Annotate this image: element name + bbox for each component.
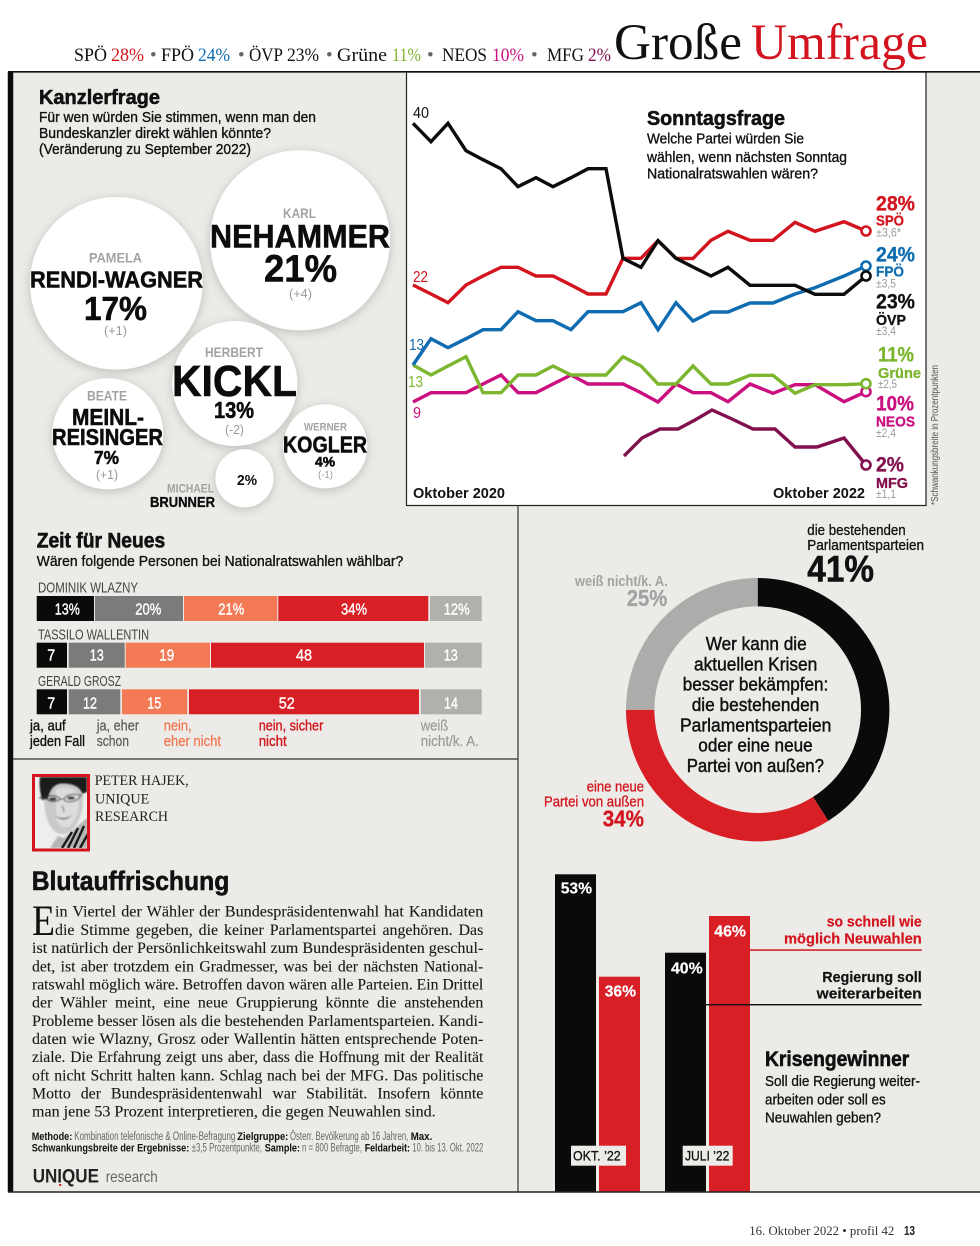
- question text: arbeiten oder soll es: [765, 1092, 886, 1108]
- question text: Neuwahlen geben?: [765, 1111, 881, 1127]
- series label: Neuwahlen: möglich Neuwahlen: [784, 930, 922, 947]
- heading: Sonntagsfrage: Sonntagsfrage: [647, 108, 785, 130]
- side note: margin of error: *Schwankungsbreite in Prozentpunkten: [929, 365, 941, 505]
- heading: Kanzlerfrage: Kanzlerfrage: [39, 87, 160, 109]
- header: party results strip: 23%: [287, 45, 319, 66]
- bubble: Meinl-Reisinger: BEATE: [87, 388, 127, 404]
- end label: FPÖ: 24%: [876, 244, 915, 267]
- end label: MFG: MFG: [876, 475, 908, 492]
- question text: [765, 1074, 920, 1127]
- article body: ratswahl möglich wäre. Betroffen davon wären alle Parteien. Ein Drittel: [32, 976, 484, 993]
- end label: NEOS: [876, 393, 915, 440]
- start values: 40: [413, 105, 429, 122]
- question text: Bundeskanzler direkt wählen könnte?: [39, 126, 271, 142]
- line: ÖVP: [413, 123, 870, 294]
- donut label: 25%: 25%: [627, 585, 667, 611]
- question text: Wären folgende Personen bei Nationalratswahlen wählbar?: [37, 553, 403, 570]
- question text: wählen, wenn nächsten Sonntag: [646, 150, 847, 166]
- bar row: Gerald Grosz: 15: [147, 695, 161, 712]
- end label: SPÖ: [876, 193, 915, 240]
- end label: Grüne: Grüne: [878, 365, 921, 382]
- author name: PETER HAJEK,: [95, 773, 189, 789]
- drop cap: E: [32, 898, 55, 945]
- bubble: Nehammer: 21%: [264, 249, 337, 291]
- article body: man jene 53 Prozent interpretieren, die gegen Neuwahlen sind.: [32, 1104, 436, 1121]
- end label: ÖVP: [876, 291, 915, 338]
- line: NEOS: [413, 375, 870, 402]
- panel: Kanzlerfrage: [30, 87, 390, 511]
- bar row: Dominik Wlazny: 20%: [135, 601, 161, 618]
- legend: nicht: [259, 734, 287, 750]
- title: [614, 15, 928, 71]
- series label: Regierung: Regierung soll: [822, 969, 922, 986]
- end label: ÖVP: 23%: [876, 291, 915, 314]
- question text: [39, 110, 316, 158]
- bar row: Gerald Grosz: 14: [444, 695, 458, 712]
- bar row: Dominik Wlazny: 13%: [55, 601, 80, 618]
- bubble: Nehammer: [210, 150, 390, 330]
- header: party results strip: MFG: [547, 45, 584, 66]
- line: Grüne: [413, 357, 870, 393]
- line: MFG: [624, 410, 870, 470]
- header: party results strip: •: [238, 45, 245, 66]
- bubble: Kogler: [283, 404, 367, 488]
- header: party results strip: •: [531, 45, 538, 66]
- time axis labels: Oktober 2020: [413, 485, 505, 502]
- donut centre question: [680, 633, 831, 776]
- question text: Nationalratswahlen wären?: [647, 166, 818, 182]
- panel: Sonntagsfrage line chart: [406, 72, 926, 506]
- header: party results strip: NEOS: [442, 45, 487, 66]
- footer: 16. Oktober 2022 • profil 42: [749, 1223, 894, 1238]
- end label: NEOS: ±2,4: [876, 428, 897, 440]
- bubble: Brunner: 2%: [237, 472, 257, 489]
- question text: (Veränderung zu September 2022): [39, 142, 251, 158]
- bar: Okt 22 black 53%: [555, 874, 596, 1192]
- end label: MFG: 2%: [876, 454, 904, 477]
- author portrait: [34, 776, 88, 850]
- header: party results strip: Grüne: [337, 45, 387, 66]
- donut centre question: aktuellen Krisen: [694, 653, 817, 674]
- end label: Grüne: [878, 344, 921, 391]
- bar: Juli 22 red 46%: [709, 916, 750, 1192]
- series label: Neuwahlen: [750, 914, 922, 951]
- article body: Motto der Bundespräsidentenwahl war Stabilität. Insofern könnte: [32, 1086, 483, 1102]
- donut label: 41%: [807, 523, 924, 590]
- donut label: 25%: [574, 574, 668, 611]
- bar row: Gerald Grosz: 52: [279, 695, 295, 712]
- bar row: Dominik Wlazny: 34%: [341, 601, 367, 618]
- bubble: Kickl: KICKL: [172, 357, 297, 406]
- bar: Okt 22 black 53%: 53%: [561, 880, 592, 897]
- bubble: Rendi-Wagner: PAMELA: [89, 250, 142, 266]
- bubble: Kogler: (-1): [318, 469, 333, 481]
- end label: MFG: ±1,1: [876, 489, 896, 501]
- methodology note: 10. bis 13. Okt. 2022: [412, 1143, 483, 1155]
- bubble: Meinl-Reisinger: MEINL-: [72, 404, 144, 430]
- bar row: Dominik Wlazny: 12%: [444, 601, 470, 618]
- header: party results strip: 28%: [111, 45, 144, 66]
- donut chart: [544, 523, 924, 832]
- bar row: Tassilo Wallentin: [37, 626, 482, 668]
- end label: FPÖ: FPÖ: [876, 264, 904, 281]
- legend: nein, sicher: [259, 719, 323, 735]
- donut centre question: besser bekämpfen:: [683, 674, 828, 695]
- article body: oft nicht Schritt halten kann. Schlag nach bei der MFG. Das politische: [32, 1067, 483, 1084]
- bubble: Brunner: [150, 449, 274, 511]
- donut centre question: oder eine neue: [698, 735, 813, 756]
- end label: FPÖ: ±3,5: [876, 279, 896, 291]
- donut label: 25%: weiß nicht/k. A.: [574, 574, 668, 590]
- heading: Blutauffrischung: Blutauffrischung: [32, 866, 229, 896]
- methodology note: Sample:: [265, 1143, 300, 1155]
- header: party results strip: •: [427, 45, 434, 66]
- line: SPÖ: [413, 222, 870, 303]
- title: Große: [614, 15, 742, 71]
- bubble: Brunner: MICHAEL: [167, 482, 214, 496]
- methodology note: Österr. Bevölkerung ab 16 Jahren,: [290, 1131, 408, 1143]
- bar row: Gerald Grosz: 12: [83, 695, 97, 712]
- bubble: Meinl-Reisinger: (+1): [96, 467, 118, 482]
- bar row: Tassilo Wallentin: TASSILO WALLENTIN: [38, 626, 149, 643]
- legend: [29, 719, 479, 750]
- bubble: Meinl-Reisinger: [52, 378, 163, 489]
- period tag: Juli 22: JULI ’22: [685, 1148, 729, 1164]
- time axis labels: [413, 485, 865, 502]
- logo: Unique Research: research: [106, 1169, 158, 1186]
- end label: NEOS: 10%: [876, 393, 914, 416]
- donut label: 41%: 41%: [807, 549, 874, 590]
- bar row: Dominik Wlazny: DOMINIK WLAZNY: [38, 580, 138, 597]
- rules: [8, 71, 980, 73]
- bubble: Kickl: (-2): [225, 422, 244, 437]
- start values: 13: [409, 337, 424, 354]
- end label: MFG: [876, 454, 908, 501]
- author name: RESEARCH: [95, 809, 168, 825]
- question text: Welche Partei würden Sie: [647, 132, 804, 148]
- panel: Zeit für Neues: [29, 530, 482, 750]
- heading: Zeit für Neues: Zeit für Neues: [37, 530, 165, 553]
- bar row: Tassilo Wallentin: 19: [159, 648, 174, 665]
- methodology note: [32, 1131, 483, 1155]
- end label: FPÖ: [876, 244, 915, 291]
- footer: 13: [904, 1224, 915, 1238]
- series label: Regierung: weiterarbeiten: [816, 986, 922, 1003]
- logo: Unique Research: [33, 1165, 158, 1187]
- methodology note: n = 800 Befragte,: [302, 1143, 362, 1155]
- donut label: 34%: Partei von außen: [544, 795, 644, 811]
- bubble: Rendi-Wagner: 17%: [84, 290, 147, 327]
- question text: Für wen würden Sie stimmen, wenn man den: [39, 110, 316, 126]
- legend: jeden Fall: [29, 734, 85, 750]
- bubble: Nehammer: NEHAMMER: [210, 219, 390, 255]
- bar: Juli 22 red 46%: 46%: [714, 924, 746, 941]
- header: party results strip: •: [150, 45, 157, 66]
- bar row: Gerald Grosz: 7: [47, 695, 55, 712]
- bar row: Tassilo Wallentin: 13: [444, 648, 458, 665]
- bubble: Rendi-Wagner: (+1): [104, 323, 127, 338]
- bar: Juli 22 black 40%: 40%: [671, 960, 703, 977]
- time axis labels: Oktober 2022: [773, 485, 865, 502]
- methodology note: Kombination telefonische & Online-Befragung: [74, 1131, 235, 1143]
- methodology note: Feldarbeit:: [365, 1143, 410, 1155]
- bar row: Tassilo Wallentin: 7: [47, 648, 55, 665]
- bubble: Kogler: KOGLER: [283, 432, 367, 458]
- methodology note: Schwankungsbreite der Ergebnisse:: [32, 1143, 189, 1155]
- bar row: Tassilo Wallentin: 13: [90, 648, 104, 665]
- start values: [408, 105, 429, 422]
- article body: die Stimme gegeben, die keiner Parlamentspartei angehören. Das: [55, 922, 483, 939]
- end label: SPÖ: 28%: [876, 193, 915, 216]
- bar row: Dominik Wlazny: [37, 580, 482, 621]
- bubble: Kickl: 13%: [214, 397, 254, 423]
- legend: nicht/k. A.: [421, 734, 479, 750]
- heading: Krisengewinner: Krisengewinner: [765, 1048, 909, 1071]
- start values: 13: [408, 374, 423, 391]
- end label: Grüne: 11%: [878, 344, 914, 367]
- legend: ja, auf: [29, 719, 67, 735]
- article body: ist natürlich der Persönlichkeitswahl zum Bundespräsidenten geschul-: [32, 940, 483, 957]
- article body: ziale. Die Erfahrung zeigt uns aber, dass die Hoffnung mit der Realität: [32, 1049, 484, 1066]
- bubble: Kickl: HERBERT: [205, 344, 263, 360]
- donut label: 34%: eine neue: [587, 780, 644, 796]
- end label: NEOS: NEOS: [876, 414, 915, 431]
- series label: Neuwahlen: so schnell wie: [827, 914, 922, 931]
- series label: Regierung: [706, 969, 922, 1005]
- article body: [32, 898, 484, 1121]
- end label: Grüne: ±2,5: [878, 379, 897, 391]
- title: Umfrage: [751, 15, 928, 71]
- period tag: Okt 22: OKT. ’22: [573, 1148, 621, 1164]
- start values: 9: [413, 405, 421, 422]
- bubble: Nehammer: KARL: [283, 205, 316, 221]
- header: party results strip: SPÖ: [74, 45, 107, 66]
- header: party results strip: 24%: [198, 45, 230, 66]
- header: party results strip: FPÖ: [161, 45, 194, 66]
- bar row: Tassilo Wallentin: 48: [296, 648, 312, 665]
- legend: nein,: [164, 719, 192, 735]
- donut label: 34%: [544, 780, 644, 832]
- donut centre question: Parlamentsparteien: [680, 714, 831, 735]
- article body: in Viertel der Wähler der Bundespräsidentenwahl hat Kandidaten: [55, 904, 483, 921]
- donut centre question: die bestehenden: [692, 694, 819, 715]
- donut label: 41%: Parlamentsparteien: [807, 538, 924, 554]
- bar row: Gerald Grosz: GERALD GROSZ: [38, 673, 121, 690]
- article body: der Wähler meint, eine neue Gruppierung könnte die anstehenden: [32, 995, 483, 1012]
- header: party results strip: •: [326, 45, 333, 66]
- end label: ÖVP: ÖVP: [876, 312, 906, 329]
- article body: daten wie Wlazny, Grosz oder Wallentin hätten entsprechende Poten-: [32, 1031, 483, 1048]
- question text: [646, 132, 847, 182]
- donut centre question: Partei von außen?: [687, 755, 824, 776]
- legend: weiß: [420, 719, 448, 735]
- bar: Juli 22 black 40%: [665, 953, 706, 1192]
- donut label: 41%: die bestehenden: [807, 523, 906, 539]
- end label: SPÖ: ±3,6*: [876, 228, 901, 240]
- legend: schon: [97, 734, 129, 750]
- line: FPÖ: [413, 262, 870, 365]
- header: party results strip: [74, 45, 611, 66]
- bubble: Rendi-Wagner: RENDI-WAGNER: [30, 267, 203, 293]
- logo: Unique Research: UNIQUE: [33, 1165, 99, 1187]
- end label: SPÖ: SPÖ: [876, 213, 904, 230]
- header: party results strip: ÖVP: [249, 45, 283, 66]
- bar chart: Krisengewinner: [555, 874, 922, 1192]
- bubble: Rendi-Wagner: [30, 197, 203, 370]
- methodology note: Zielgruppe:: [237, 1131, 288, 1143]
- header: party results strip: 2%: [588, 45, 611, 66]
- article body: det, ist aber trotzdem ein Gradmesser, was bei der nächsten National-: [32, 958, 483, 975]
- methodology note: Max.: [411, 1131, 432, 1143]
- header: party results strip: 11%: [392, 45, 421, 66]
- bubble: Kickl: [172, 321, 297, 446]
- bubble: Nehammer: (+4): [289, 286, 312, 301]
- methodology note: Methode:: [32, 1131, 72, 1143]
- bar: Okt 22 red 36%: 36%: [605, 984, 636, 1001]
- author name: UNIQUE: [95, 791, 149, 807]
- bubble: Kogler: 4%: [315, 454, 336, 470]
- bar row: Gerald Grosz: [37, 673, 482, 714]
- bar row: Dominik Wlazny: 21%: [218, 601, 244, 618]
- article body: Probleme besser lösen als die bestehenden Parlamentsparteien. Kandi-: [32, 1013, 483, 1030]
- legend: ja, eher: [96, 719, 139, 735]
- donut label: 34%: 34%: [603, 806, 644, 832]
- bubble: Meinl-Reisinger: 7%: [94, 448, 119, 468]
- question text: Soll die Regierung weiter-: [765, 1074, 920, 1090]
- start values: 22: [413, 269, 428, 286]
- end label: ÖVP: ±3,4: [876, 326, 897, 338]
- header: party results strip: 10%: [492, 45, 524, 66]
- donut centre question: Wer kann die: [706, 633, 807, 654]
- bubble: Meinl-Reisinger: REISINGER: [52, 424, 163, 450]
- bubble: Kogler: WERNER: [304, 422, 347, 434]
- methodology note: ±3,5 Prozentpunkte,: [192, 1143, 262, 1155]
- author name: [95, 773, 189, 825]
- bar: Okt 22 red 36%: [599, 977, 640, 1192]
- legend: eher nicht: [164, 734, 221, 750]
- bubble: Brunner: BRUNNER: [150, 494, 215, 511]
